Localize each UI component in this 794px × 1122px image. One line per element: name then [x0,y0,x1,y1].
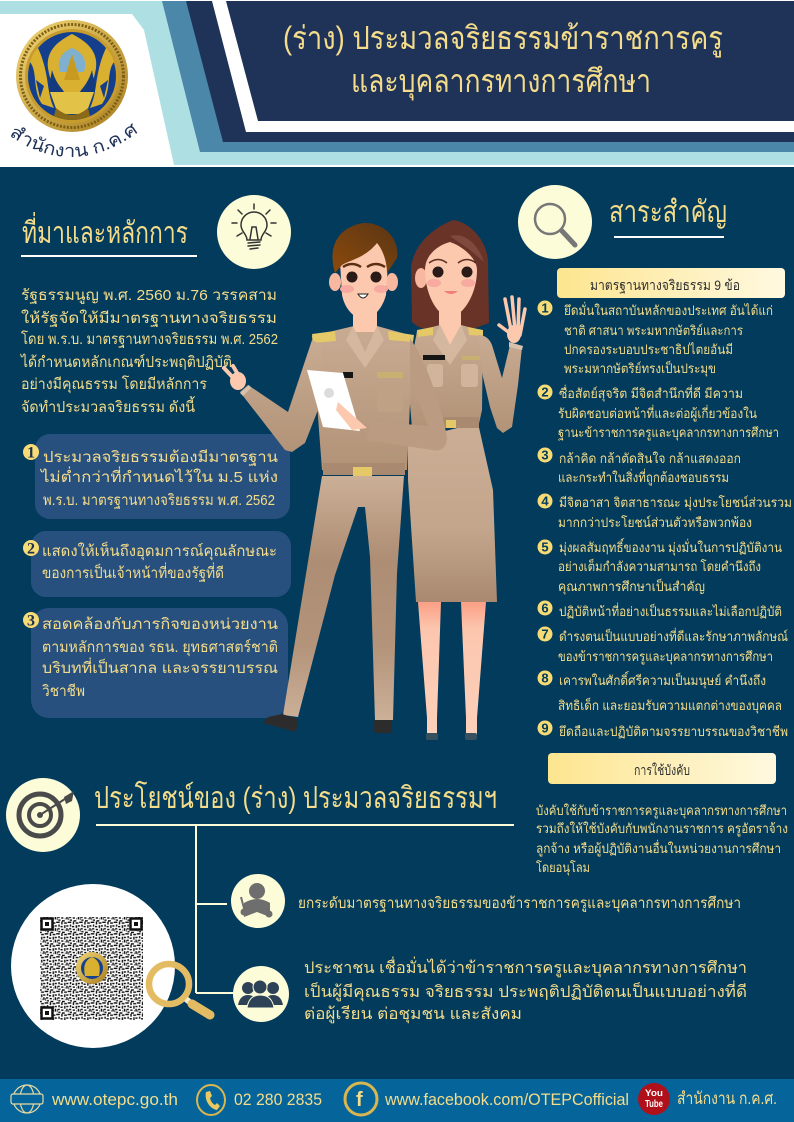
intro paragraph [20,287,278,416]
panel: principle 2 [23,531,291,597]
title: และบุคลากรทางการศึกษา [351,63,651,101]
icon: gold magnifying glass [149,964,210,1015]
panel: principle 1: ไม่ต่ำกว่าที่กำหนดไว้ใน ม.5 แห่ง [40,466,278,486]
item 4: 4 [541,494,549,508]
item 2: ซื่อสัตย์สุจริต มีจิตสำนึกที่ดี มีความ [559,385,743,402]
benefit text: public [304,956,747,1024]
banner: enforcement: การใช้บังคับ [634,762,690,778]
item 7 [538,626,788,665]
illustration: male civil servant with tablet [224,223,447,733]
item 1: 1 [541,300,549,316]
item 5: 5 [541,540,549,554]
item 4: มากกว่าประโยชน์ส่วนตัวหรือพวกพ้อง [558,515,752,530]
item 7: 7 [541,626,549,642]
section heading: key points [609,196,727,238]
intro paragraph: รัฐธรรมนูญ พ.ศ. 2560 ม.76 วรรคสาม [21,287,277,304]
list: nine standards [538,300,792,739]
item 2: 2 [541,384,549,400]
item 2 [538,384,779,441]
enforcement paragraph: โดยอนุโลม [536,860,590,876]
item 5 [538,538,782,595]
item 5: อย่างเต็มกำลังความสามารถ โดยคำนึงถึง [558,557,761,574]
intro paragraph: โดย พ.ร.บ. มาตรฐานทางจริยธรรม พ.ศ. 2562 [21,330,278,348]
icon: globe [11,1085,43,1113]
QR code [11,884,175,1048]
icon: YouTube [638,1083,670,1115]
header banner [0,0,794,167]
panel: principle 3: วิชาชีพ [41,683,85,700]
panel: principle 2: 2 [27,540,35,558]
section heading: origin and principles: ที่มาและหลักการ [22,212,188,250]
icon: target with arrow [6,778,80,852]
intro paragraph: อย่างมีคุณธรรม โดยมีหลักการ [21,375,207,394]
icon: YouTube: Tube [645,1099,663,1110]
item 1 [538,300,773,377]
benefit text: public: เป็นผู้มีคุณธรรม จริยธรรม ประพฤติปฏิบัติตนเป็นแบบอย่างที่ดี [304,980,747,1002]
illustration: female civil servant [408,220,525,740]
panel: principle 3: สอดคล้องกับภารกิจของหน่วยงาน [42,616,278,633]
item 3: และกระทำในสิ่งที่ถูกต้องชอบธรรม [558,469,729,486]
panel: principle 1: ประมวลจริยธรรมต้องมีมาตรฐาน [43,449,278,466]
logo: OTEPC seal [16,20,128,132]
icon: facebook: f [356,1089,363,1111]
intro paragraph: จัดทำประมวลจริยธรรม ดังนี้ [21,396,195,416]
icon: reader [231,874,285,928]
item 3 [538,448,741,486]
item 1: ชาติ ศาสนา พระมหากษัตริย์และการ [564,323,743,338]
website: www.otepc.go.th [51,1090,178,1109]
benefit text: standards: ยกระดับมาตรฐานทางจริยธรรมของข้าราชการครูและบุคลากรทางการศึกษา [298,895,741,913]
banner: nine ethical standards [557,268,785,298]
item 9: 9 [541,720,549,736]
item 1: ยึดมั่นในสถาบันหลักของประเทศ อันได้แก่ [564,302,773,318]
item 8: เคารพในศักดิ์ศรีความเป็นมนุษย์ คำนึงถึง [559,671,766,689]
item 8 [538,670,782,714]
item 4 [538,494,792,530]
item 1: พระมหากษัตริย์ทรงเป็นประมุข [564,359,716,377]
item 1: ปกครองระบอบประชาธิปไตยอันมี [564,342,733,357]
enforcement paragraph [536,803,788,876]
banner: enforcement [548,753,776,784]
footer bar [0,1079,794,1122]
connector lines [96,825,514,993]
icon: YouTube: You [645,1088,663,1098]
icon: phone [197,1085,225,1115]
item 3: 3 [541,448,549,462]
banner: nine ethical standards: มาตรฐานทางจริยธรรม 9 ข้อ [590,277,740,294]
item 8: 8 [541,670,549,686]
panel: principle 3: ตามหลักการของ รธน. ยุทธศาสตร์ชาติ [42,639,278,657]
benefit text: public: ประชาชน เชื่อมั่นได้ว่าข้าราชการครูและบุคลากรทางการศึกษา [304,956,747,978]
item 3: กล้าคิด กล้าตัดสินใจ กล้าแสดงออก [559,451,741,466]
section heading: key points: สาระสำคัญ [609,196,727,229]
panel: principle 1: 1 [27,444,35,462]
panel: principle 1: พ.ร.บ. มาตรฐานทางจริยธรรม พ.ศ. 2562 [43,492,275,509]
phone number: 02 280 2835 [234,1090,322,1109]
title: (ร่าง) ประมวลจริยธรรมข้าราชการครู [283,20,723,58]
panel: principle 3 [23,608,288,718]
item 6: 6 [541,600,549,616]
intro paragraph: ให้รัฐจัดให้มีมาตรฐานทางจริยธรรม [21,309,277,327]
icon: light bulb [217,195,291,269]
title [283,20,723,101]
icon: facebook [345,1083,377,1115]
benefit text: public: ต่อผู้เรียน ต่อชุมชน และสังคม [304,1005,522,1024]
item 2: รับผิดชอบต่อหน้าที่และต่อผู้เกี่ยวข้องใน [558,405,757,422]
item 5: คุณภาพการศึกษาเป็นสำคัญ [558,577,705,595]
panel: principle 2: ของการเป็นเจ้าหน้าที่ของรัฐที่ดี [42,562,224,582]
icon: magnifying glass [518,185,592,259]
panel: principle 1 [23,434,290,519]
intro paragraph: ได้กำหนดหลักเกณฑ์ประพฤติปฏิบัติ [20,353,232,371]
facebook address: www.facebook.com/OTEPCofficial [384,1090,629,1109]
section heading: benefits: ประโยชน์ของ (ร่าง) ประมวลจริยธรรมฯ [94,780,497,815]
panel: principle 2: แสดงให้เห็นถึงอุดมการณ์คุณลักษณะ [42,541,277,561]
panel: principle 3: บริบทที่เป็นสากล และจรรยาบรรณ [42,657,278,677]
icon: group of people [233,966,289,1022]
panel: principle 3: 3 [27,612,35,630]
